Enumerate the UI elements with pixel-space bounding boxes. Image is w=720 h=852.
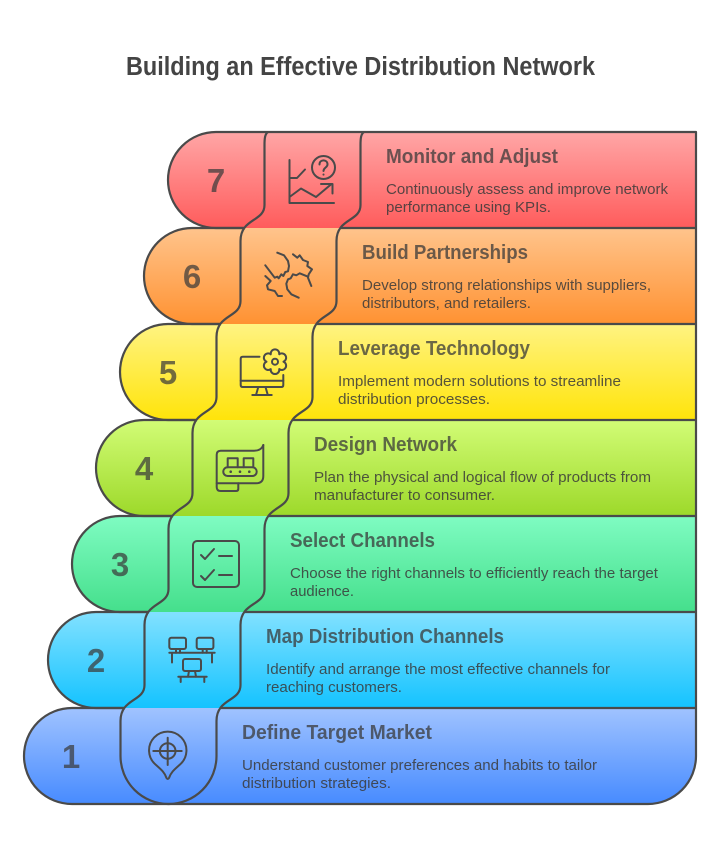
step 7 text: Continuously assess and improve network [386, 182, 669, 198]
step 3 text [290, 530, 658, 600]
step 1 text: distribution strategies. [242, 776, 391, 792]
step 7 number: 7 [207, 162, 225, 199]
step 6 text: Develop strong relationships with suppliers, [362, 278, 651, 294]
step 3 number: 3 [111, 546, 129, 583]
panel: step 1 band [24, 708, 696, 804]
step 4 text: Design Network [314, 434, 458, 456]
step 7 text [386, 146, 669, 216]
step 3 text: Select Channels [290, 530, 435, 552]
step 7 text: performance using KPIs. [386, 200, 551, 216]
title: Building an Effective Distribution Network [126, 53, 596, 81]
panel: step 7 band [168, 132, 696, 228]
step 5 number: 5 [159, 354, 177, 391]
panel: step 2 band [48, 612, 696, 708]
step 4 text: manufacturer to consumer. [314, 488, 495, 504]
step 4 text [314, 434, 651, 504]
panel: step 6 band [144, 228, 696, 324]
icon: conveyor on scroll [217, 445, 263, 491]
step 1 number: 1 [62, 738, 80, 775]
step 1 text: Define Target Market [242, 722, 432, 744]
panel: step 5 band [120, 324, 696, 420]
step 6 text: distributors, and retailers. [362, 296, 531, 312]
step 5 text: distribution processes. [338, 392, 490, 408]
icon: interlocked hands [265, 253, 312, 298]
step 7 text: Monitor and Adjust [386, 146, 558, 168]
step 6 number: 6 [183, 258, 201, 295]
step 5 text: Leverage Technology [338, 338, 531, 360]
step 5 text [338, 338, 621, 408]
step 5 text: Implement modern solutions to streamline [338, 374, 621, 390]
step 1 text: Understand customer preferences and habits to tailor [242, 758, 597, 774]
icon: target location pin [149, 732, 186, 779]
icon: networked computers [169, 638, 215, 682]
band outlines [24, 132, 696, 804]
step 3 text: Choose the right channels to efficiently reach the target [290, 566, 658, 582]
icon: chart with question mark [290, 156, 335, 203]
step 2 text [266, 626, 610, 696]
step 2 text: reaching customers. [266, 680, 402, 696]
icon: checklist [193, 541, 239, 587]
panel: step 4 band [96, 420, 696, 516]
step 6 text [362, 242, 651, 312]
step 2 number: 2 [87, 642, 105, 679]
icon: monitor with gear [241, 349, 286, 395]
step 4 number: 4 [135, 450, 154, 487]
step 2 text: Identify and arrange the most effective channels for [266, 662, 610, 678]
step 1 text [242, 722, 597, 792]
step 3 text: audience. [290, 584, 354, 600]
panel: step 3 band [72, 516, 696, 612]
step 4 text: Plan the physical and logical flow of products from [314, 470, 651, 486]
step 6 text: Build Partnerships [362, 242, 528, 264]
step 2 text: Map Distribution Channels [266, 626, 504, 648]
